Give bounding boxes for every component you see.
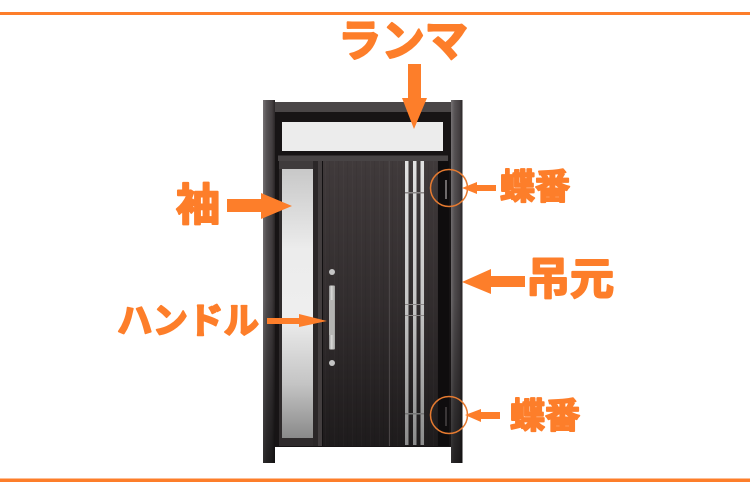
sidelight glass xyxy=(282,169,313,438)
bottom rule xyxy=(0,478,750,482)
upper lock xyxy=(329,269,335,275)
upper hinge circle xyxy=(430,170,468,206)
head frame bar xyxy=(275,102,451,112)
right post xyxy=(451,100,462,463)
transom lower bar xyxy=(278,156,448,161)
lower hinge xyxy=(445,407,447,426)
arrow: lower 蝶番 xyxy=(465,409,500,422)
lower hinge circle xyxy=(430,396,468,434)
transom glass xyxy=(282,122,443,151)
lower lock xyxy=(329,360,335,366)
arrow: 吊元 xyxy=(462,269,525,294)
door leaf dividers xyxy=(389,161,390,446)
upper hinge xyxy=(445,180,447,199)
door unit xyxy=(263,100,462,463)
frame backing xyxy=(275,102,451,447)
left post xyxy=(263,100,275,463)
label: lower 蝶番: 蝶番 xyxy=(510,397,580,436)
sidelight frame xyxy=(279,161,323,446)
arrow: upper 蝶番 xyxy=(462,182,496,194)
arrow: ハンドル xyxy=(267,314,327,327)
decorative vertical strips xyxy=(405,161,424,445)
top rule xyxy=(0,12,750,15)
hinge-side recess xyxy=(438,161,449,446)
label: upper 蝶番: 蝶番 xyxy=(500,168,570,207)
label: ハンドル: ハンドル xyxy=(117,300,259,341)
door leaf xyxy=(323,161,438,446)
label: 吊元: 吊元 xyxy=(526,255,614,304)
label: 袖: 袖 xyxy=(176,181,220,230)
heading: ランマ: ランマ xyxy=(338,17,468,66)
door handle xyxy=(329,286,335,350)
arrow: ランマ xyxy=(402,64,427,129)
arrow: 袖 xyxy=(227,193,292,219)
